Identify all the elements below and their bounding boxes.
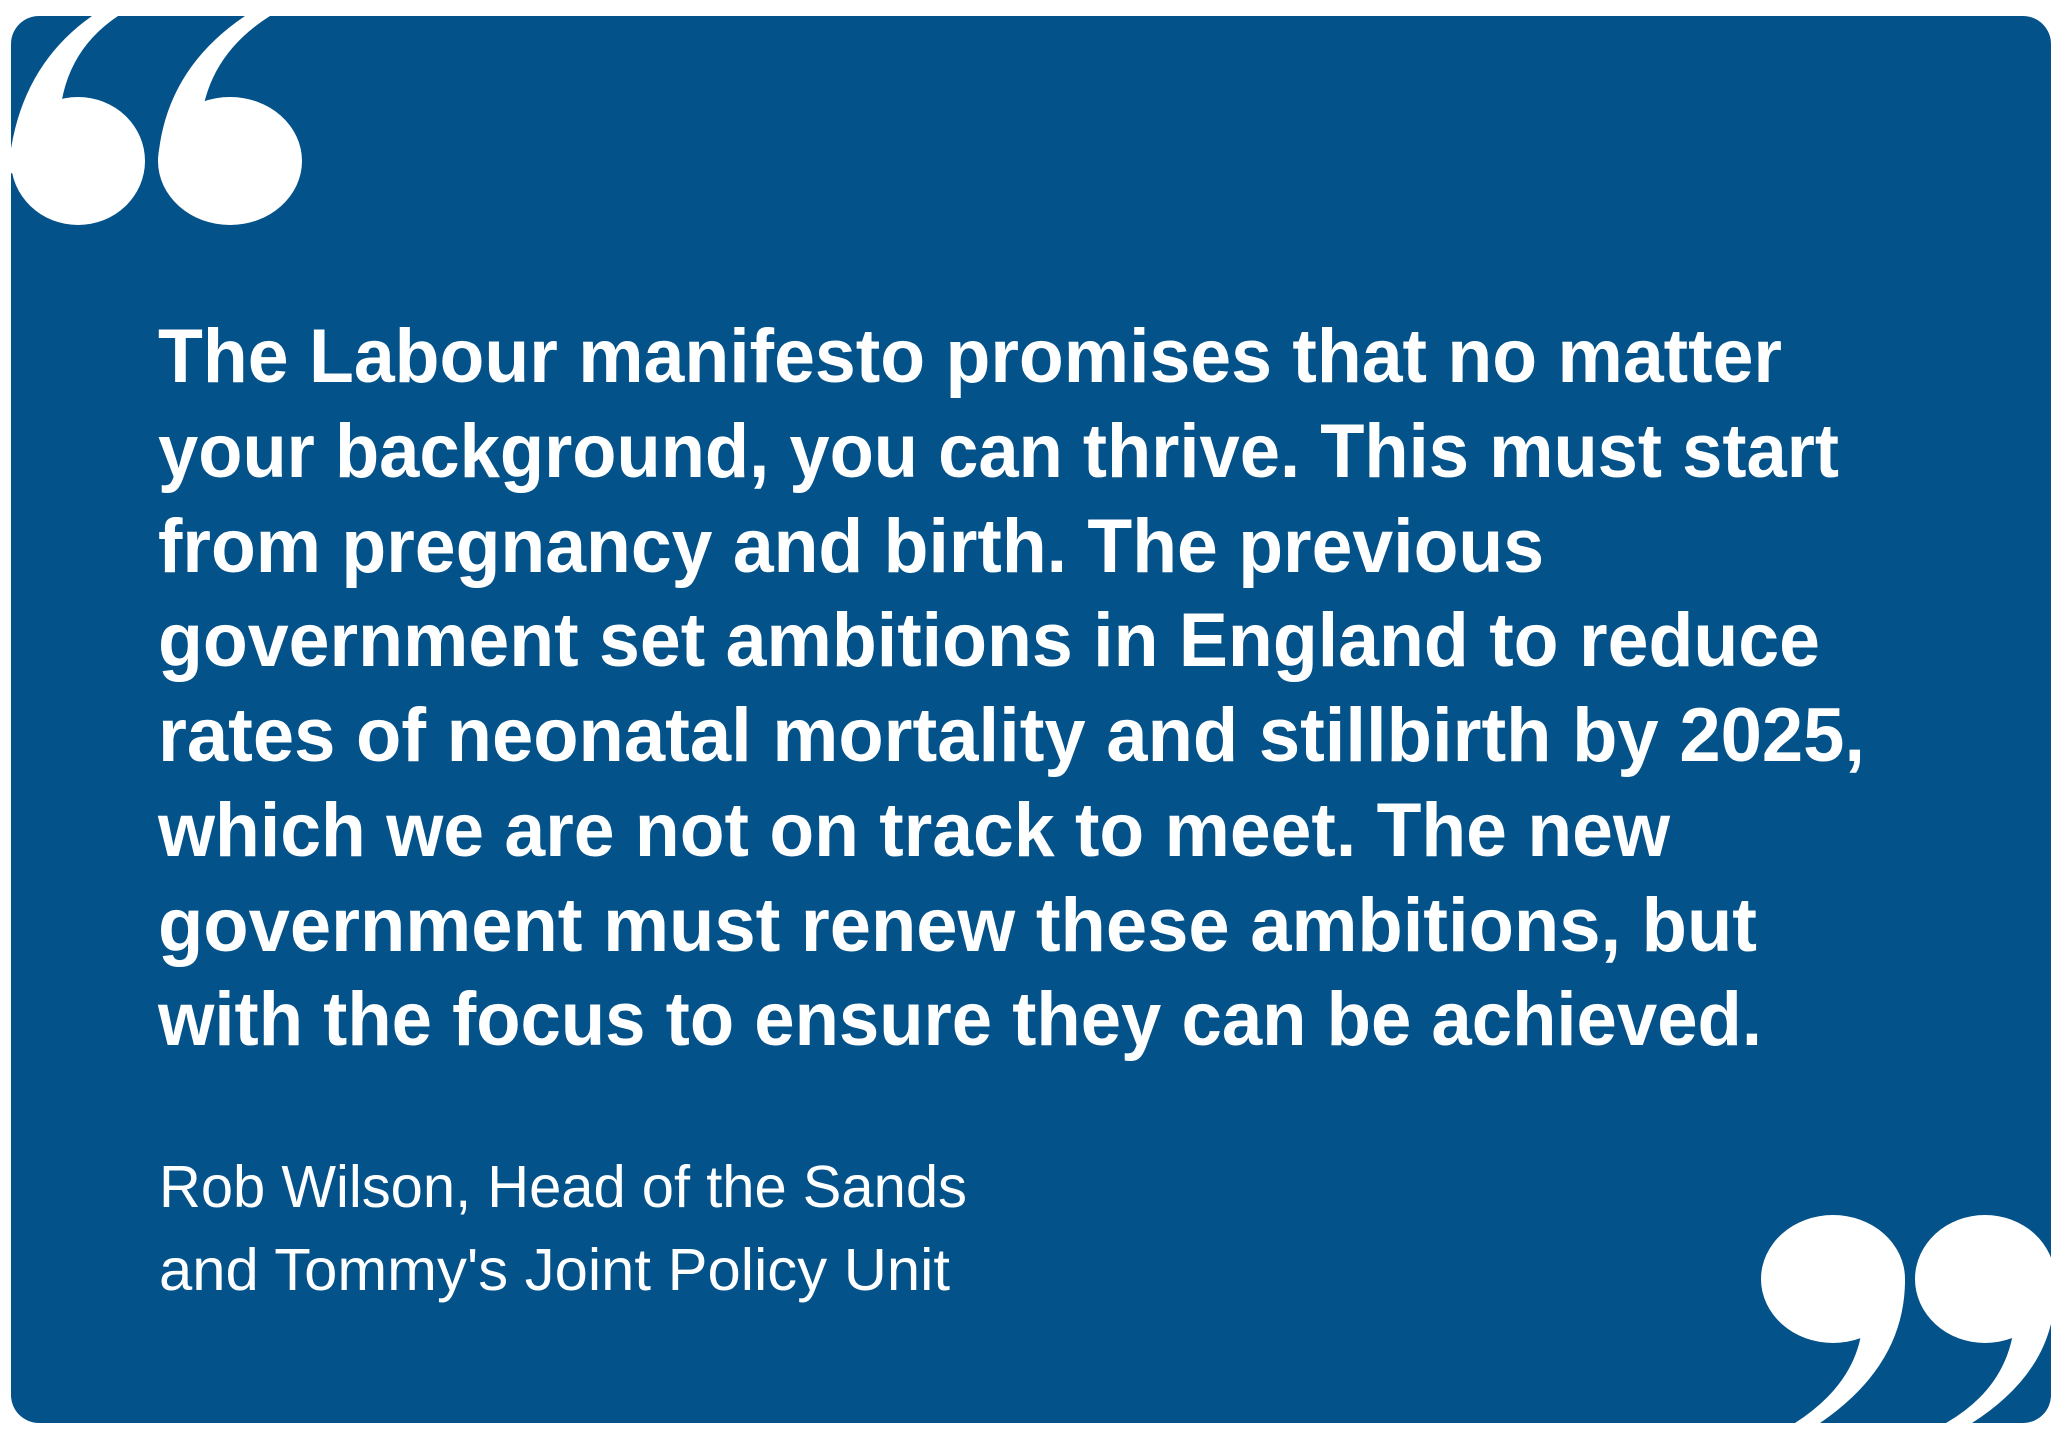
text block: main quote: from pregnancy and birth. The previous <box>158 504 1544 589</box>
icon: closing quote mark <box>1761 1215 2055 1423</box>
text block: main quote <box>157 314 1865 1062</box>
text block: main quote: The Labour manifesto promises that no matter <box>158 314 1782 399</box>
text block: main quote: which we are not on track to meet. The new <box>157 788 1671 873</box>
text block: main quote: rates of neonatal mortality and stillbirth by 2025, <box>158 693 1865 778</box>
text block: main quote: with the focus to ensure they can be achieved. <box>157 977 1762 1062</box>
text block: main quote: your background, you can thrive. This must start <box>158 409 1839 494</box>
text block: attribution: Rob Wilson, Head of the Sands <box>159 1154 967 1220</box>
text block: main quote: government must renew these ambitions, but <box>158 883 1757 968</box>
icon: opening quote mark <box>8 16 302 225</box>
text block: attribution <box>159 1154 967 1303</box>
text block: main quote: government set ambitions in England to reduce <box>158 598 1820 683</box>
text block: attribution: and Tommy's Joint Policy Unit <box>159 1237 950 1303</box>
